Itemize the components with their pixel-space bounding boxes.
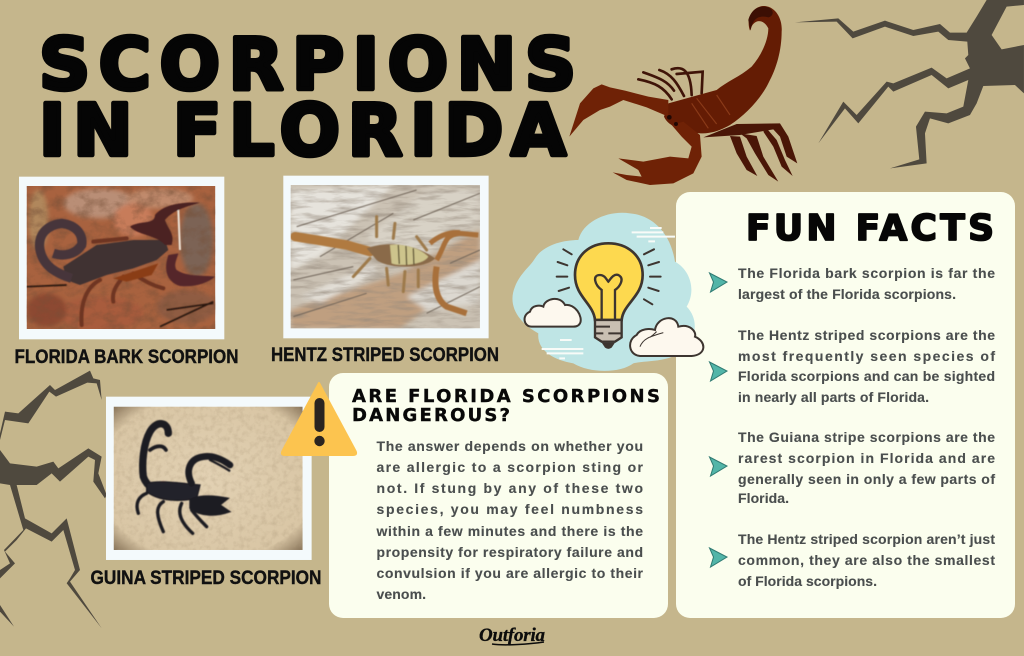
fact 3 text: The Guiana stripe scorpions are the bbox=[738, 429, 995, 445]
caption: Guiana striped scorpion: GUINA STRIPED SCORPION bbox=[90, 568, 322, 589]
panel: are Florida scorpions dangerous bbox=[329, 373, 668, 618]
photo: Hentz striped scorpion bbox=[283, 176, 489, 338]
heading: dangerous question: DANGEROUS? bbox=[352, 405, 510, 426]
text block: dangerous answer: venom. bbox=[376, 586, 426, 602]
icon: ground crack left bbox=[0, 371, 107, 628]
fact 4 text: of Florida scorpions. bbox=[738, 573, 877, 589]
text block: dangerous answer: convulsion if you are allergic to their bbox=[376, 565, 644, 581]
heading: dangerous question bbox=[352, 386, 660, 426]
heading: fun facts: FUN FACTS bbox=[746, 208, 994, 249]
fact 2 text: most frequently seen species of bbox=[738, 348, 995, 364]
text block: dangerous answer: within a few minutes and there is the bbox=[376, 523, 643, 539]
heading: dangerous question: ARE FLORIDA SCORPIONS bbox=[352, 386, 660, 407]
fact 2 text: The Hentz striped scorpions are the bbox=[738, 327, 995, 343]
text block: dangerous answer: not. If stung by any of these two bbox=[376, 480, 643, 496]
title bbox=[39, 23, 576, 172]
fact 1 text: largest of the Florida scorpions. bbox=[738, 286, 956, 302]
fact 2 text bbox=[738, 327, 995, 405]
icon: arrow bullet 2 bbox=[710, 362, 727, 381]
icon: light bulb with clouds bbox=[512, 213, 703, 371]
fact 3 text bbox=[738, 429, 995, 506]
fact 1 text: The Florida bark scorpion is far the bbox=[738, 265, 995, 281]
panel: fun facts bbox=[676, 192, 1015, 618]
icon: arrow bullet 4 bbox=[710, 548, 727, 567]
title: IN FLORIDA bbox=[39, 89, 566, 172]
photo: Guiana striped scorpion bbox=[106, 397, 312, 560]
photo: Florida bark scorpion bbox=[19, 177, 224, 339]
fact 3 text: rarest scorpion in Florida and are bbox=[738, 450, 995, 466]
fact 3 text: generally seen in only a few parts of bbox=[738, 471, 995, 487]
icon: warning triangle bbox=[282, 383, 356, 455]
fact 4 text bbox=[738, 531, 995, 589]
fact 2 text: in nearly all parts of Florida. bbox=[738, 389, 929, 405]
text block: dangerous answer: are allergic to a scorpion sting or bbox=[376, 459, 644, 475]
fact 2 text: Florida scorpions and can be sighted bbox=[738, 368, 995, 384]
text block: dangerous answer: The answer depends on whether you bbox=[376, 438, 643, 454]
fact 4 text: The Hentz striped scorpion aren’t just bbox=[738, 531, 995, 547]
icon: arrow bullet 1 bbox=[710, 273, 727, 292]
text block: dangerous answer: species, you may feel numbness bbox=[376, 501, 643, 517]
title: SCORPIONS bbox=[39, 23, 576, 106]
fact 3 text: Florida. bbox=[738, 490, 789, 506]
caption: Hentz striped scorpion: HENTZ STRIPED SCORPION bbox=[271, 345, 499, 366]
icon: arrow bullet 3 bbox=[710, 457, 727, 476]
fact 1 text bbox=[738, 265, 995, 302]
fact 4 text: common, they are also the smallest bbox=[738, 552, 995, 568]
icon: ground crack top right bbox=[795, 0, 1024, 168]
caption: Florida bark scorpion: FLORIDA BARK SCORPION bbox=[14, 347, 238, 368]
icon: scorpion illustration bbox=[569, 6, 797, 185]
text block: dangerous answer: propensity for respiratory failure and bbox=[376, 544, 643, 560]
text block: dangerous answer bbox=[376, 438, 644, 602]
logo: Outforia: Outforia bbox=[479, 625, 546, 646]
